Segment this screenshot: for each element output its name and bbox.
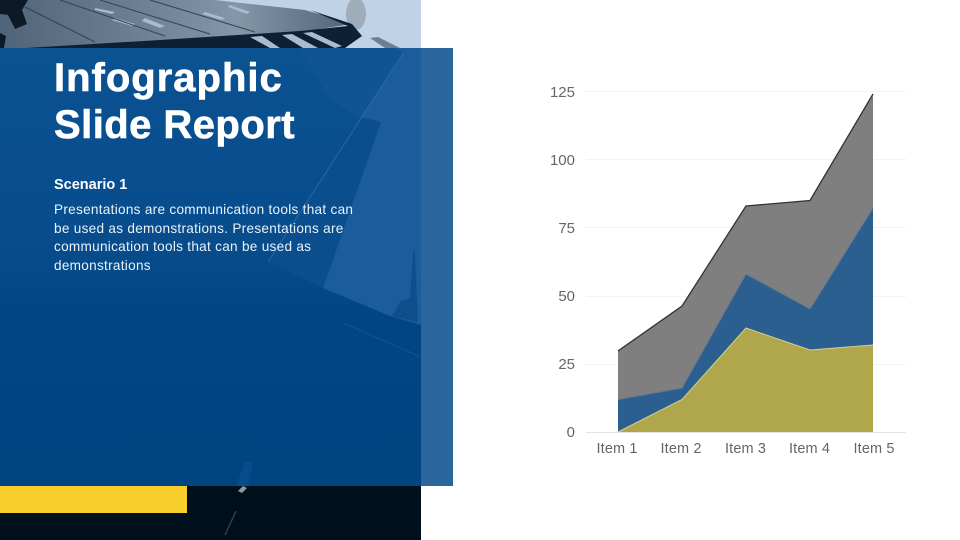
body text: Presentations are communication tools that can <box>54 202 353 217</box>
title: Infographic <box>54 56 283 100</box>
y axis labels: 50 <box>558 288 575 305</box>
roof glass strips <box>95 5 250 28</box>
smoke <box>346 0 366 30</box>
x axis labels: Item 2 <box>660 441 702 457</box>
yellow accent bar <box>0 486 187 513</box>
x axis labels: Item 1 <box>596 441 638 457</box>
area chart <box>550 84 906 457</box>
diagonal glint <box>268 52 404 262</box>
antenna silhouette <box>392 252 418 322</box>
y axis labels: 125 <box>550 84 575 101</box>
olive area <box>618 328 873 432</box>
sky <box>0 0 421 48</box>
x axis labels: Item 3 <box>725 441 766 457</box>
y axis labels: 100 <box>550 152 575 169</box>
body text: demonstrations <box>54 258 151 272</box>
y axis labels: 75 <box>558 220 575 237</box>
main overlay <box>0 48 421 486</box>
dark base photo <box>0 486 421 540</box>
y axis labels: 0 <box>567 424 575 441</box>
sky through overlay <box>323 48 421 325</box>
right strip of overlay <box>421 48 453 486</box>
body text: be used as demonstrations. Presentations are <box>54 220 344 236</box>
lower edge line <box>343 323 421 357</box>
title: Slide Report <box>54 103 295 147</box>
body text: communication tools that can be used as <box>54 239 311 254</box>
y axis labels: 25 <box>558 356 575 373</box>
title <box>54 56 295 147</box>
yellow accent bar shadow <box>0 486 188 514</box>
upper reflection band <box>300 48 404 118</box>
y axis labels <box>550 84 575 441</box>
tower through overlay <box>268 118 381 288</box>
x axis labels <box>596 441 894 457</box>
subheading: Scenario 1 <box>54 177 127 193</box>
spot below overlay <box>236 462 253 486</box>
gray area <box>618 94 873 432</box>
body text <box>54 202 353 272</box>
roof surface <box>0 0 352 48</box>
blue area <box>618 208 873 432</box>
roof dark edge <box>25 10 362 48</box>
x axis labels: Item 4 <box>789 441 830 457</box>
grid lines <box>586 92 906 364</box>
leaves <box>0 0 28 29</box>
x axis labels: Item 5 <box>854 441 894 457</box>
